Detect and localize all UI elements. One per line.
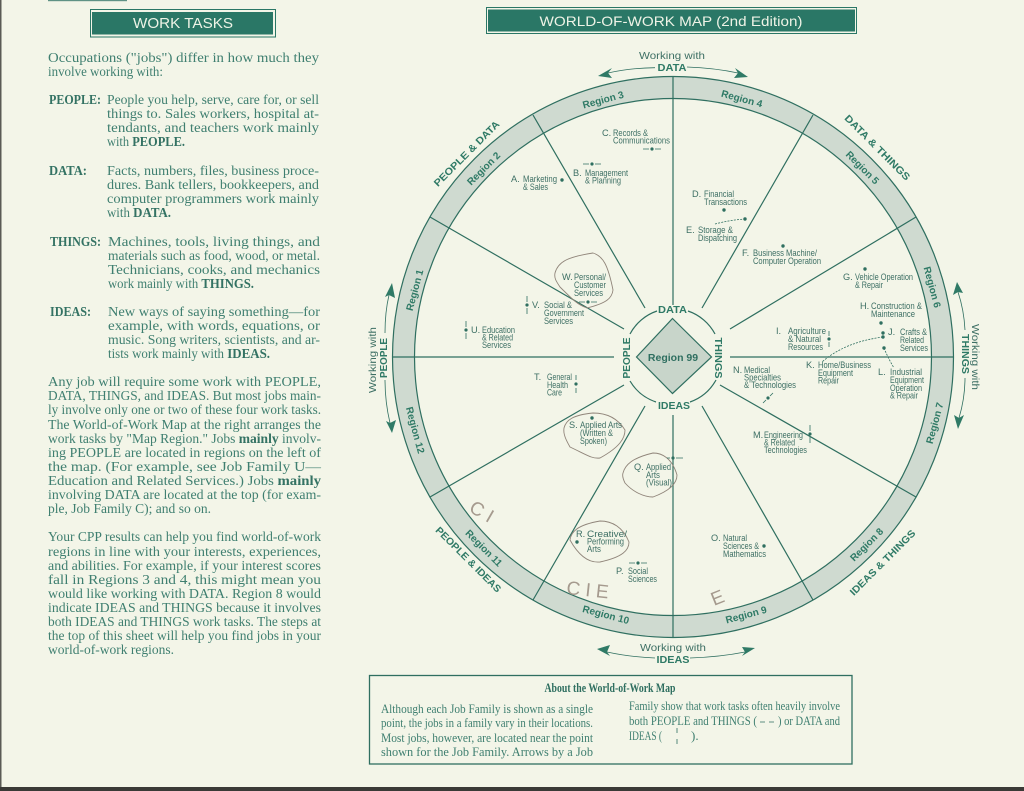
job family O: Sciences & xyxy=(723,541,759,551)
center circle: THINGS xyxy=(712,338,724,378)
definition: people: things to. Sales workers, hospital at- xyxy=(107,106,320,121)
job family N xyxy=(733,365,796,403)
definition: people: People you help, serve, care for, or sell xyxy=(107,92,319,107)
job family Q: Q. xyxy=(634,462,644,472)
job family A: Marketing xyxy=(523,174,557,184)
job family R: Arts xyxy=(587,544,601,554)
axis label: working with things: Working with xyxy=(969,324,981,390)
job family F: Business Machine/ xyxy=(753,248,817,258)
text block: any job: Any job will require some work with PEOPLE, xyxy=(48,374,321,389)
center diamond: region 99 xyxy=(636,318,712,394)
definition: things xyxy=(50,234,320,291)
job family U: Services xyxy=(482,340,511,350)
job family H: Construction & xyxy=(871,301,922,311)
region labels: Region 5 xyxy=(843,149,881,187)
text block: any job: ly involve only one or two of these four work tasks. xyxy=(48,402,321,417)
job family W: W. xyxy=(562,272,573,282)
job family I: Resources xyxy=(788,342,823,352)
job family J: Crafts & xyxy=(900,327,927,337)
job family V: Social & xyxy=(544,300,572,310)
job family K: K. xyxy=(806,360,815,370)
region labels: Region 10 xyxy=(581,604,631,627)
job family C: C. xyxy=(602,128,611,138)
region labels: Region 3 xyxy=(582,90,626,111)
job family C: Records & xyxy=(613,128,648,138)
job family E xyxy=(686,217,747,243)
job family G: Vehicle Operation xyxy=(855,272,913,282)
definition: ideas: music. Song writers, scientists, and ar- xyxy=(108,332,321,347)
region labels: Region 12 xyxy=(403,406,426,455)
job family F: Computer Operation xyxy=(753,256,821,266)
job family D: Financial xyxy=(704,189,734,199)
center circle xyxy=(621,304,724,412)
text block: cpp results: would like working with DATA. Region 8 would xyxy=(48,586,321,601)
region labels: Region 8 xyxy=(848,526,886,564)
job family U: & Related xyxy=(482,332,513,342)
axis label: working with ideas xyxy=(597,642,755,666)
job family I: & Natural xyxy=(788,334,821,344)
job family P: P. xyxy=(616,566,624,576)
job family E: Storage & xyxy=(698,225,733,235)
job family N: Specialties xyxy=(744,372,781,382)
job family B: & Planning xyxy=(585,176,621,186)
map wheel xyxy=(392,76,954,638)
center diamond: region 99: Region 99 xyxy=(648,352,698,364)
job family M: M. xyxy=(753,430,763,440)
job families xyxy=(464,128,928,584)
heading: work tasks: WORK TASKS xyxy=(133,16,233,32)
job family L xyxy=(878,346,924,400)
region labels: Region 1 xyxy=(405,268,426,312)
job family H: H. xyxy=(860,301,869,311)
job family D: Transactions xyxy=(704,197,747,207)
panel right text: ). xyxy=(691,728,699,743)
hand-drawn circles xyxy=(555,253,677,562)
panel title: About the World-of-Work Map xyxy=(544,681,676,695)
definition: things: Technicians, cooks, and mechanics xyxy=(108,262,320,277)
job family A: & Sales xyxy=(523,182,548,192)
job family R xyxy=(575,529,627,554)
job family V: V. xyxy=(532,300,540,310)
text block: cpp results: the top of this sheet will help you find jobs in your xyxy=(48,628,321,643)
definition: people: tendants, and teachers work mainly xyxy=(107,120,319,135)
job family O: O. xyxy=(711,533,721,543)
definition: ideas xyxy=(50,304,321,361)
axis label: working with data: DATA xyxy=(658,62,687,74)
handwritten notes: E xyxy=(708,586,728,611)
panel left text: shown for the Job Family. Arrows by a Job xyxy=(381,744,593,759)
panel left text: Most jobs, however, are located near the point xyxy=(381,730,593,745)
region labels: Region 2 xyxy=(465,150,503,188)
definition: people: PEOPLE: xyxy=(49,92,101,107)
text block: cpp results: indicate IDEAS and THINGS because it involves xyxy=(48,600,321,615)
axis label: working with ideas: IDEAS xyxy=(656,654,690,666)
text block: intro: Occupations ("jobs") differ in how much they xyxy=(48,50,319,65)
job family D: D. xyxy=(692,189,701,199)
combined task labels: PEOPLE & IDEAS xyxy=(433,525,503,595)
job family C: Communications xyxy=(613,136,670,146)
job family S xyxy=(569,416,622,446)
job family S: Spoken) xyxy=(580,436,607,446)
panel: about the map xyxy=(370,676,852,764)
definition: ideas: New ways of saying something—for xyxy=(108,304,321,319)
region labels xyxy=(403,89,946,627)
job family M: Technologies xyxy=(764,445,807,455)
text block: cpp results: Your CPP results can help you find world-of-work xyxy=(48,529,321,544)
definition: things: work mainly with THINGS. xyxy=(108,276,254,291)
definition: data: dures. Bank tellers, bookkeepers, and xyxy=(107,177,319,192)
axis label: working with things: THINGS xyxy=(959,334,971,374)
job family I: I. xyxy=(776,326,781,336)
job family O: Natural xyxy=(723,533,747,543)
text block: cpp results: fall in Regions 3 and 4, this might mean you xyxy=(48,572,321,587)
job family R: R. xyxy=(576,529,585,539)
job family E: Dispatching xyxy=(698,233,737,243)
text block: cpp results: and abilities. For example, if your interest scores xyxy=(48,558,321,573)
center circle: IDEAS xyxy=(658,400,690,412)
job family U: Education xyxy=(482,325,515,335)
panel right text: IDEAS ( xyxy=(629,728,662,743)
job family N: N. xyxy=(733,365,742,375)
handwritten notes xyxy=(466,497,728,611)
text block: cpp results: world-of-work regions. xyxy=(48,642,174,657)
job family K xyxy=(806,335,885,386)
region ring xyxy=(392,76,954,638)
panel right text xyxy=(629,698,840,744)
job family S: (Written & xyxy=(580,428,613,438)
definition: data xyxy=(49,163,320,220)
job family D xyxy=(692,189,747,212)
text block: intro xyxy=(48,50,319,79)
job family T xyxy=(534,372,578,398)
job family J: J. xyxy=(888,327,895,337)
job family A xyxy=(511,174,564,192)
region labels: Region 11 xyxy=(463,528,504,570)
job family Q: (Visual) xyxy=(646,478,672,488)
panel right text: both PEOPLE and THINGS ( xyxy=(629,713,757,728)
combined task labels: IDEAS & THINGS xyxy=(848,528,918,598)
panel left text: Although each Job Family is shown as a single xyxy=(381,701,593,716)
job family I: Agriculture xyxy=(788,326,826,336)
job family F xyxy=(742,244,821,266)
job family P: Social xyxy=(628,566,648,576)
combined task labels xyxy=(432,113,918,598)
definition: ideas: example, with words, equations, or xyxy=(108,318,321,333)
job family K: Equipment xyxy=(818,368,853,378)
job family J: Related xyxy=(900,335,924,345)
job family V xyxy=(525,296,584,326)
text block: any job: ing PEOPLE are located in regions on the left of xyxy=(48,445,322,460)
job family P: Sciences xyxy=(628,574,657,584)
text block: intro: involve working with: xyxy=(48,64,163,79)
job family Q: Arts xyxy=(646,470,660,480)
text block: cpp results xyxy=(48,529,321,657)
definition: data: with DATA. xyxy=(107,205,171,220)
job family L: L. xyxy=(878,367,886,377)
job family K: Home/Business xyxy=(818,360,871,370)
job family T: Health xyxy=(547,380,568,390)
definition: ideas: tists work mainly with IDEAS. xyxy=(108,346,270,361)
definition: things: materials such as food, wood, or metal. xyxy=(108,248,320,263)
job family C xyxy=(602,128,670,151)
job family Q: Applied xyxy=(646,462,671,472)
job family H xyxy=(860,301,922,325)
job family V: Services xyxy=(544,316,573,326)
job family M: & Related xyxy=(764,438,795,448)
axis label: working with ideas: Working with xyxy=(640,642,706,654)
job family P xyxy=(616,561,657,584)
job family A: A. xyxy=(511,174,520,184)
job family F: F. xyxy=(742,248,749,258)
panel right text: ) or DATA and xyxy=(778,713,840,728)
text block: any job: the map. (For example, see Job Family U— xyxy=(48,459,322,474)
job family N: Medical xyxy=(744,365,770,375)
job family B: Management xyxy=(585,168,628,178)
job family W: Services xyxy=(574,288,603,298)
job family S: S. xyxy=(569,420,578,430)
axis label: working with people xyxy=(367,283,396,433)
job family I xyxy=(776,326,831,352)
text block: any job: Education and Related Services.) Jobs mainly xyxy=(48,473,321,488)
job family L: & Repair xyxy=(890,390,918,400)
text block: cpp results: regions in line with your interests, experiences, xyxy=(48,544,321,559)
text block: any job: work tasks by "Map Region." Jobs mainly involv- xyxy=(48,431,322,446)
job family O xyxy=(711,533,766,559)
axis label: working with people: Working with xyxy=(367,327,379,393)
text block: any job: DATA, THINGS, and IDEAS. But most jobs main- xyxy=(48,388,321,403)
handwritten notes: C I xyxy=(466,497,497,527)
job family W: Customer xyxy=(574,280,606,290)
region labels: Region 9 xyxy=(725,605,769,626)
center circle: PEOPLE xyxy=(621,338,633,378)
axis label: working with people: PEOPLE xyxy=(378,338,390,378)
job family H: Maintenance xyxy=(871,309,915,319)
text block: any job: ple, Job Family C); and so on. xyxy=(48,501,211,516)
definition: data: Facts, numbers, files, business proce- xyxy=(107,163,320,178)
combined task labels: DATA & THINGS xyxy=(842,113,912,183)
definition: things: Machines, tools, living things, and xyxy=(108,234,320,249)
job family E: E. xyxy=(686,225,695,235)
definition: data: computer programmers work mainly xyxy=(107,191,319,206)
axis label: working with things xyxy=(953,282,981,429)
definition: people xyxy=(49,92,320,149)
job family Q xyxy=(634,456,683,488)
job family N: & Technologies xyxy=(744,380,796,390)
job family T: T. xyxy=(534,372,541,382)
text block: cpp results: both IDEAS and THINGS work tasks. The steps at xyxy=(48,614,321,629)
region spokes xyxy=(392,76,954,638)
definition: data: DATA: xyxy=(49,163,87,178)
job family T: General xyxy=(547,372,572,382)
heading: world-of-work map xyxy=(486,8,856,34)
job family G xyxy=(843,267,913,290)
region labels: Region 7 xyxy=(925,401,946,445)
job family L: Operation xyxy=(890,383,922,393)
job family M: Engineering xyxy=(764,430,803,440)
definition: ideas: IDEAS: xyxy=(50,304,91,319)
heading: work tasks xyxy=(90,10,276,37)
job family W: Personal/ xyxy=(574,272,606,282)
job family W xyxy=(562,272,606,304)
text block: any job xyxy=(48,374,322,516)
job family G: & Repair xyxy=(855,280,883,290)
job family S: Applied Arts xyxy=(580,420,622,430)
job family U: U. xyxy=(471,325,480,335)
region labels: Region 6 xyxy=(921,266,942,310)
job family T: Care xyxy=(547,388,562,398)
heading: world-of-work map: WORLD-OF-WORK MAP (2nd Edition) xyxy=(540,13,802,29)
job family K: Repair xyxy=(818,376,839,386)
combined task labels: PEOPLE & DATA xyxy=(432,119,502,189)
axis label: working with data: Working with xyxy=(639,50,705,62)
region labels: Region 4 xyxy=(720,89,764,110)
job family L: Equipment xyxy=(890,375,924,385)
definition: people: with PEOPLE. xyxy=(107,134,185,149)
panel left text: point, the jobs in a family vary in their locations. xyxy=(381,715,593,730)
job family U xyxy=(464,321,515,350)
job family V: Government xyxy=(544,308,584,318)
job family L: Industrial xyxy=(890,367,922,377)
job family B xyxy=(573,162,628,186)
job family M xyxy=(753,425,812,455)
definition: things: THINGS: xyxy=(50,234,101,249)
panel right text: Family show that work tasks often heavily involve xyxy=(629,698,840,713)
job family R: Creative/ xyxy=(587,529,627,539)
job family R: Performing xyxy=(587,536,624,546)
handwritten notes: C I E xyxy=(565,578,610,603)
axis label: working with data xyxy=(598,50,748,78)
text block: any job: involving DATA are located at the top (for exam- xyxy=(48,487,322,502)
text block: any job: The World-of-Work Map at the right arranges the xyxy=(48,417,321,432)
job family O: Mathematics xyxy=(723,549,766,559)
center circle: DATA xyxy=(658,304,687,316)
job family B: B. xyxy=(573,168,582,178)
job family G: G. xyxy=(843,272,853,282)
panel left text xyxy=(381,701,593,759)
job family J xyxy=(881,327,928,353)
job family J: Services xyxy=(900,343,928,353)
